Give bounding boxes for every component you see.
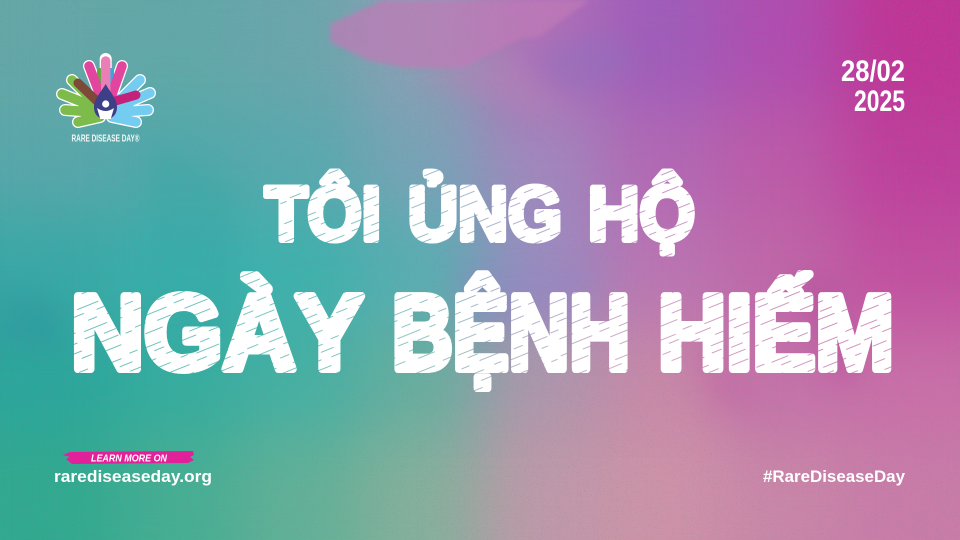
logo caption: RARE DISEASE DAY® bbox=[72, 134, 140, 144]
icon: figure in drop bbox=[94, 84, 117, 119]
title line 2: BỆNH bbox=[392, 274, 630, 392]
title line 1: ỦNG bbox=[408, 172, 562, 257]
title line 2: NGÀY bbox=[71, 274, 363, 392]
title line 1: HỘ bbox=[588, 172, 695, 257]
date: 2025 bbox=[854, 85, 905, 118]
title line 2 bbox=[71, 274, 894, 392]
date: 28/02 bbox=[841, 55, 905, 88]
hashtag: #RareDiseaseDay bbox=[763, 467, 906, 486]
brush label bbox=[63, 451, 194, 464]
date bbox=[841, 55, 905, 118]
title line 1: TÔI bbox=[265, 172, 381, 257]
title line 2: HIẾM bbox=[658, 274, 894, 392]
logo: Rare Disease Day bbox=[62, 59, 150, 144]
icon: hands bbox=[62, 59, 150, 122]
title line 1 bbox=[265, 172, 695, 257]
website: rarediseaseday.org bbox=[54, 467, 212, 486]
label text: LEARN MORE ON bbox=[91, 454, 168, 464]
call to action bbox=[54, 451, 212, 486]
